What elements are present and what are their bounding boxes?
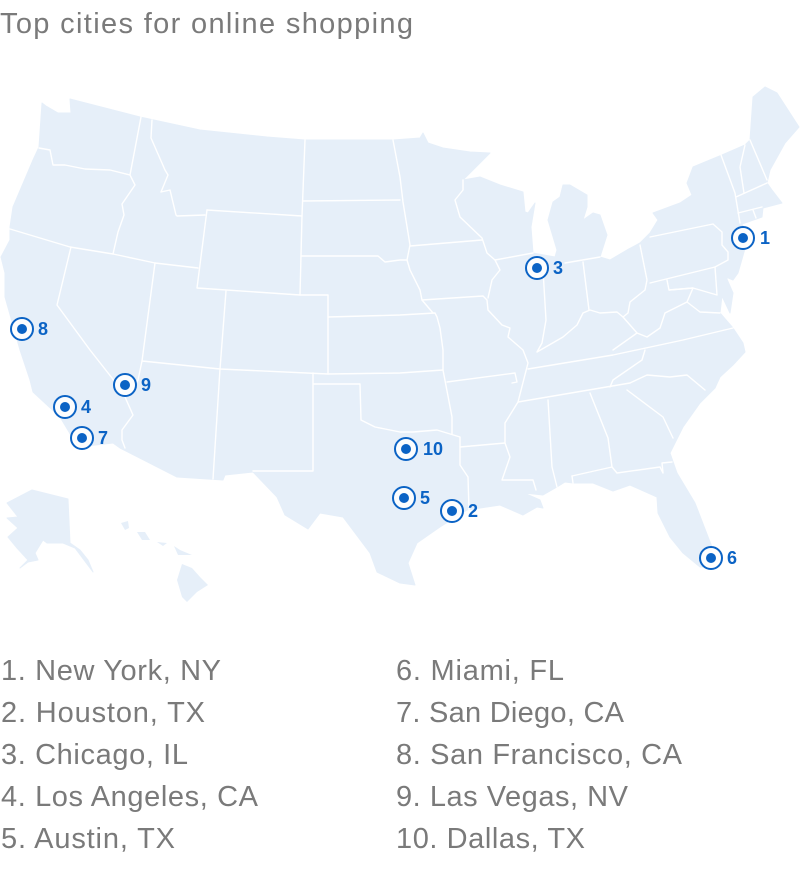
marker 2 Houston: 2 <box>468 501 478 521</box>
marker 6 Miami <box>700 547 737 569</box>
marker 8 San Francisco <box>11 318 48 340</box>
ranked list, right column: 6. Miami, FL <box>396 655 564 687</box>
marker 10 Dallas <box>395 438 443 460</box>
city markers <box>11 227 770 569</box>
ranked list, left column: 5. Austin, TX <box>1 823 175 855</box>
marker 3 Chicago: 3 <box>553 258 563 278</box>
marker 7 San Diego: 7 <box>98 428 108 448</box>
marker 8 San Francisco: 8 <box>38 319 48 339</box>
marker 7 San Diego <box>71 427 108 449</box>
marker 1 New York <box>732 227 770 249</box>
marker 4 Los Angeles <box>54 396 91 418</box>
marker 9 Las Vegas: 9 <box>141 375 151 395</box>
marker 9 Las Vegas <box>114 374 151 396</box>
marker 2 Houston <box>441 500 478 522</box>
ranked list, right column <box>396 655 683 855</box>
Alaska <box>7 490 93 572</box>
ranked list, left column: 1. New York, NY <box>1 655 221 687</box>
marker 5 Austin <box>393 487 430 509</box>
ranked list, left column: 4. Los Angeles, CA <box>1 781 259 813</box>
state borders <box>10 117 767 510</box>
ranked list, left column <box>1 655 259 855</box>
contiguous states land <box>1 87 799 585</box>
marker 6 Miami: 6 <box>727 548 737 568</box>
marker 1 New York: 1 <box>760 228 770 248</box>
ranked list, right column: 7. San Diego, CA <box>396 697 625 729</box>
marker 4 Los Angeles: 4 <box>81 397 91 417</box>
ranked list, right column: 10. Dallas, TX <box>396 823 585 855</box>
marker 3 Chicago <box>526 257 563 279</box>
title: Top cities for online shopping <box>0 8 413 40</box>
ranked list, left column: 2. Houston, TX <box>1 697 205 729</box>
ranked list, right column: 8. San Francisco, CA <box>396 739 683 771</box>
Hawaii <box>121 521 208 602</box>
ranked list, left column: 3. Chicago, IL <box>1 739 188 771</box>
ranked list, right column: 9. Las Vegas, NV <box>396 781 629 813</box>
marker 5 Austin: 5 <box>420 488 430 508</box>
map of the United States <box>1 87 799 602</box>
marker 10 Dallas: 10 <box>423 439 443 459</box>
